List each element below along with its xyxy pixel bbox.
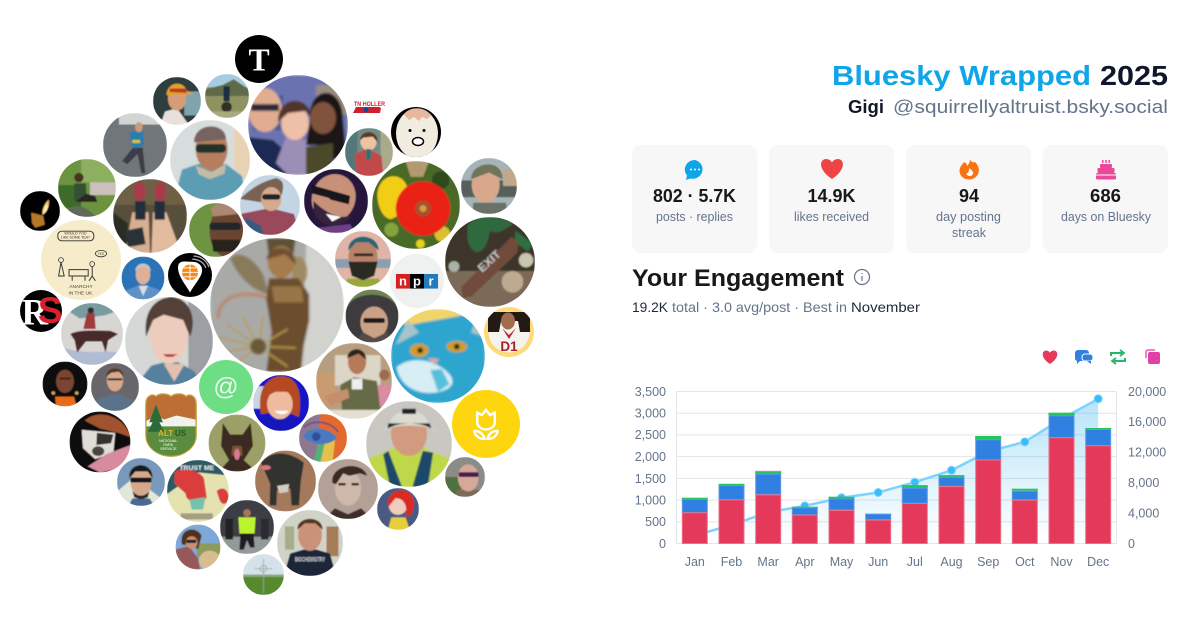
- avatar: comic anarchy in the UK: YES: [98, 252, 104, 256]
- avatar: NPR logo: n: [399, 273, 407, 288]
- avatar: RS logo: R: [21, 291, 49, 332]
- panel: likes received: likes received: [794, 210, 869, 224]
- avatar: TN Holler logo: [353, 100, 386, 113]
- avatar: anime selfie: [345, 128, 393, 176]
- title: [832, 60, 1168, 91]
- left axis labels: [635, 385, 666, 551]
- left axis labels: 3,500: [635, 385, 666, 399]
- month labels: [685, 555, 1109, 569]
- panel: day posting streak: day posting: [936, 210, 1001, 224]
- avatar: legs and trail shoes: [113, 179, 187, 253]
- month labels: Feb: [721, 555, 742, 569]
- avatar: man with purple sunglasses: [445, 457, 485, 497]
- avatar: red-haired doll: [377, 488, 419, 530]
- month labels: Jun: [868, 555, 888, 569]
- avatar: woman with hood: [346, 290, 398, 342]
- left axis labels: 3,000: [635, 406, 666, 420]
- avatar: man in cap: [461, 158, 517, 214]
- engagement summary: November: [851, 299, 920, 315]
- month labels: Nov: [1050, 555, 1073, 569]
- avatar: leaves and exit sign: EXIT: [475, 247, 504, 275]
- avatar: New York Times logo: T: [248, 43, 270, 78]
- avatar: bearded man with glasses: [304, 168, 368, 233]
- right axis labels: 20,000: [1128, 385, 1166, 399]
- avatar: man with hat and sunglasses: [170, 120, 250, 200]
- avatar: RS logo: S: [38, 290, 63, 331]
- avatar: person sitting by river: [58, 159, 116, 217]
- avatar: ALT US National Park Service badge: US: [175, 429, 187, 438]
- avatar: comic anarchy in the UK: [41, 220, 121, 300]
- panel: posts and replies: [632, 145, 757, 253]
- avatar: dog in blanket: [70, 412, 130, 472]
- panel: likes received: [769, 145, 894, 253]
- right axis labels: [1128, 385, 1166, 551]
- left axis labels: 1,000: [635, 494, 666, 508]
- avatar: German shepherd: [208, 414, 266, 472]
- avatar: NPR logo: r: [429, 273, 434, 288]
- avatar: man with black glasses: [117, 458, 165, 506]
- left axis labels: 2,500: [635, 428, 666, 442]
- month labels: Oct: [1015, 555, 1035, 569]
- avatar: D1 jersey in yellow ring: D1: [500, 339, 518, 354]
- cumulative area: [695, 399, 1098, 544]
- panel: day posting streak: 94: [959, 186, 979, 206]
- avatar: comic anarchy in the UK: LIKE SOME TEA?: [61, 235, 90, 239]
- avatar: ALT US National Park Service badge: ALT: [158, 429, 173, 438]
- avatar: blue cat painting: [391, 309, 485, 403]
- avatar: woman with golden dog: [176, 524, 220, 570]
- panel: day posting streak: streak: [952, 226, 987, 240]
- combo chart: monthly engagement: [635, 385, 1166, 569]
- user handle: @squirrellyaltruist.bsky.social: [893, 97, 1168, 117]
- panel: days on Bluesky: 686: [1090, 186, 1121, 206]
- month labels: Jan: [685, 555, 705, 569]
- engagement summary: total · 3.0 avg/post · Best in: [672, 299, 847, 315]
- panel: days on Bluesky: days on Bluesky: [1061, 210, 1152, 224]
- title: Bluesky Wrapped: [832, 60, 1091, 91]
- icon: replies bubbles: [1075, 350, 1093, 364]
- right axis labels: 4,000: [1128, 506, 1159, 520]
- avatar: NPR logo: p: [413, 273, 421, 288]
- avatar: green at sign: [199, 360, 253, 414]
- right axis labels: 8,000: [1128, 476, 1159, 490]
- avatar: leaves and exit sign: [445, 217, 535, 307]
- avatar: man in neon shirt and running vest: [366, 401, 452, 487]
- avatar cluster: [20, 35, 535, 595]
- avatar: runner on road: [103, 113, 167, 177]
- left axis labels: 500: [645, 515, 666, 529]
- avatar: red poppy: [372, 161, 460, 249]
- heading: Your Engagement: Your Engagement: [632, 265, 844, 292]
- icon: likes heart: [1043, 350, 1057, 364]
- avatar: bronze fairy sculpture: [210, 238, 344, 372]
- left axis labels: 1,500: [635, 472, 666, 486]
- avatar: man in black shirt: BIOCHEMISTRY: [295, 556, 326, 563]
- cumulative line: [695, 399, 1098, 536]
- icon: cake: [1096, 160, 1116, 180]
- avatar: woman portrait: [125, 297, 213, 385]
- avatar: comic anarchy in the UK: IN THE UK.: [69, 290, 93, 296]
- user name: Gigi: [848, 97, 884, 117]
- avatar: TN Holler logo: TN HOLLER: [354, 102, 386, 108]
- avatar: horseman painting: [61, 303, 123, 365]
- avatar: runner in neon shirt: [220, 500, 274, 554]
- avatar: woman with dark curls: [42, 362, 88, 406]
- icon: flame: [960, 159, 979, 180]
- avatar: woman in plaid: [240, 175, 300, 235]
- panel: posts and replies: 802 · 5.7K: [653, 186, 736, 206]
- avatar: family selfie: [248, 75, 348, 175]
- panel: days on Bluesky: [1043, 145, 1168, 253]
- avatar: comic anarchy in the UK: ANARCHY: [69, 284, 94, 290]
- avatar: ALT US National Park Service badge: NATIONAL: [159, 439, 177, 443]
- avatar: ALT US National Park Service badge: SERVICE: [160, 447, 177, 451]
- avatar: Zoidberg meme: TRUST ME: [179, 465, 215, 472]
- avatar: Zoidberg meme: [167, 460, 229, 522]
- icon: chat bubble: [685, 160, 703, 180]
- avatar: ALT US National Park Service badge: [137, 391, 205, 459]
- avatar: RS logo: [20, 290, 63, 332]
- avatar: rainbow eye: [299, 414, 347, 462]
- icon: heart: [821, 159, 843, 179]
- avatar: comic anarchy in the UK: WOULD YOU: [64, 231, 87, 235]
- month labels: Sep: [977, 555, 999, 569]
- left axis labels: 0: [659, 537, 666, 551]
- right axis labels: 0: [1128, 537, 1135, 551]
- engagement summary: [632, 299, 920, 315]
- avatar: man with glasses on grey: [91, 363, 139, 411]
- avatar: man with sunglasses by plants: [189, 203, 244, 257]
- panel: likes received: 14.9K: [808, 186, 856, 206]
- avatar: field with cross: [243, 554, 284, 595]
- left axis labels: 2,000: [635, 450, 666, 464]
- right axis labels: 12,000: [1128, 446, 1166, 460]
- chart legend: [1043, 350, 1160, 364]
- icon: repost arrows: [1111, 350, 1125, 364]
- avatar: yellow tulip icon: [452, 390, 520, 458]
- month labels: Jul: [907, 555, 923, 569]
- avatar: New York Times logo: [235, 35, 283, 83]
- avatar: dog in leaves: [255, 450, 316, 512]
- avatar: NPR logo: [390, 254, 444, 308]
- avatar: orange globe map pin: [168, 253, 212, 297]
- cumulative points: [801, 395, 1102, 510]
- grid lines: [676, 392, 1116, 544]
- avatar: bearded man in blue cap: [335, 231, 391, 287]
- month labels: May: [830, 555, 854, 569]
- avatar: man with coffee: [316, 343, 392, 419]
- avatar: runner with cap: [153, 77, 201, 125]
- avatar: ALT US National Park Service badge: PARK: [163, 443, 174, 447]
- avatar: D1 jersey in yellow ring: [484, 307, 534, 357]
- panel: day posting streak: [906, 145, 1031, 253]
- avatar: man in blue suit: [122, 256, 164, 300]
- right axis labels: 16,000: [1128, 415, 1166, 429]
- month labels: Apr: [795, 555, 815, 569]
- icon: quote squares: [1146, 350, 1160, 364]
- stacked bars: [682, 413, 1111, 544]
- month labels: Mar: [757, 555, 779, 569]
- avatar: sepia face portrait: [318, 459, 378, 519]
- avatar: candle: [20, 191, 60, 231]
- panel: posts and replies: posts · replies: [656, 210, 733, 224]
- engagement summary: 19.2K: [632, 299, 669, 315]
- avatar: hiker on hill: [205, 74, 249, 118]
- avatar: red-haired woman: [253, 375, 309, 431]
- icon: info: [854, 270, 870, 284]
- avatar: egg face: [391, 107, 441, 158]
- month labels: Dec: [1087, 555, 1109, 569]
- avatar: green at sign: @: [213, 374, 239, 401]
- title: 2025: [1100, 60, 1168, 91]
- avatar: man in black shirt: [277, 510, 343, 576]
- month labels: Aug: [940, 555, 963, 569]
